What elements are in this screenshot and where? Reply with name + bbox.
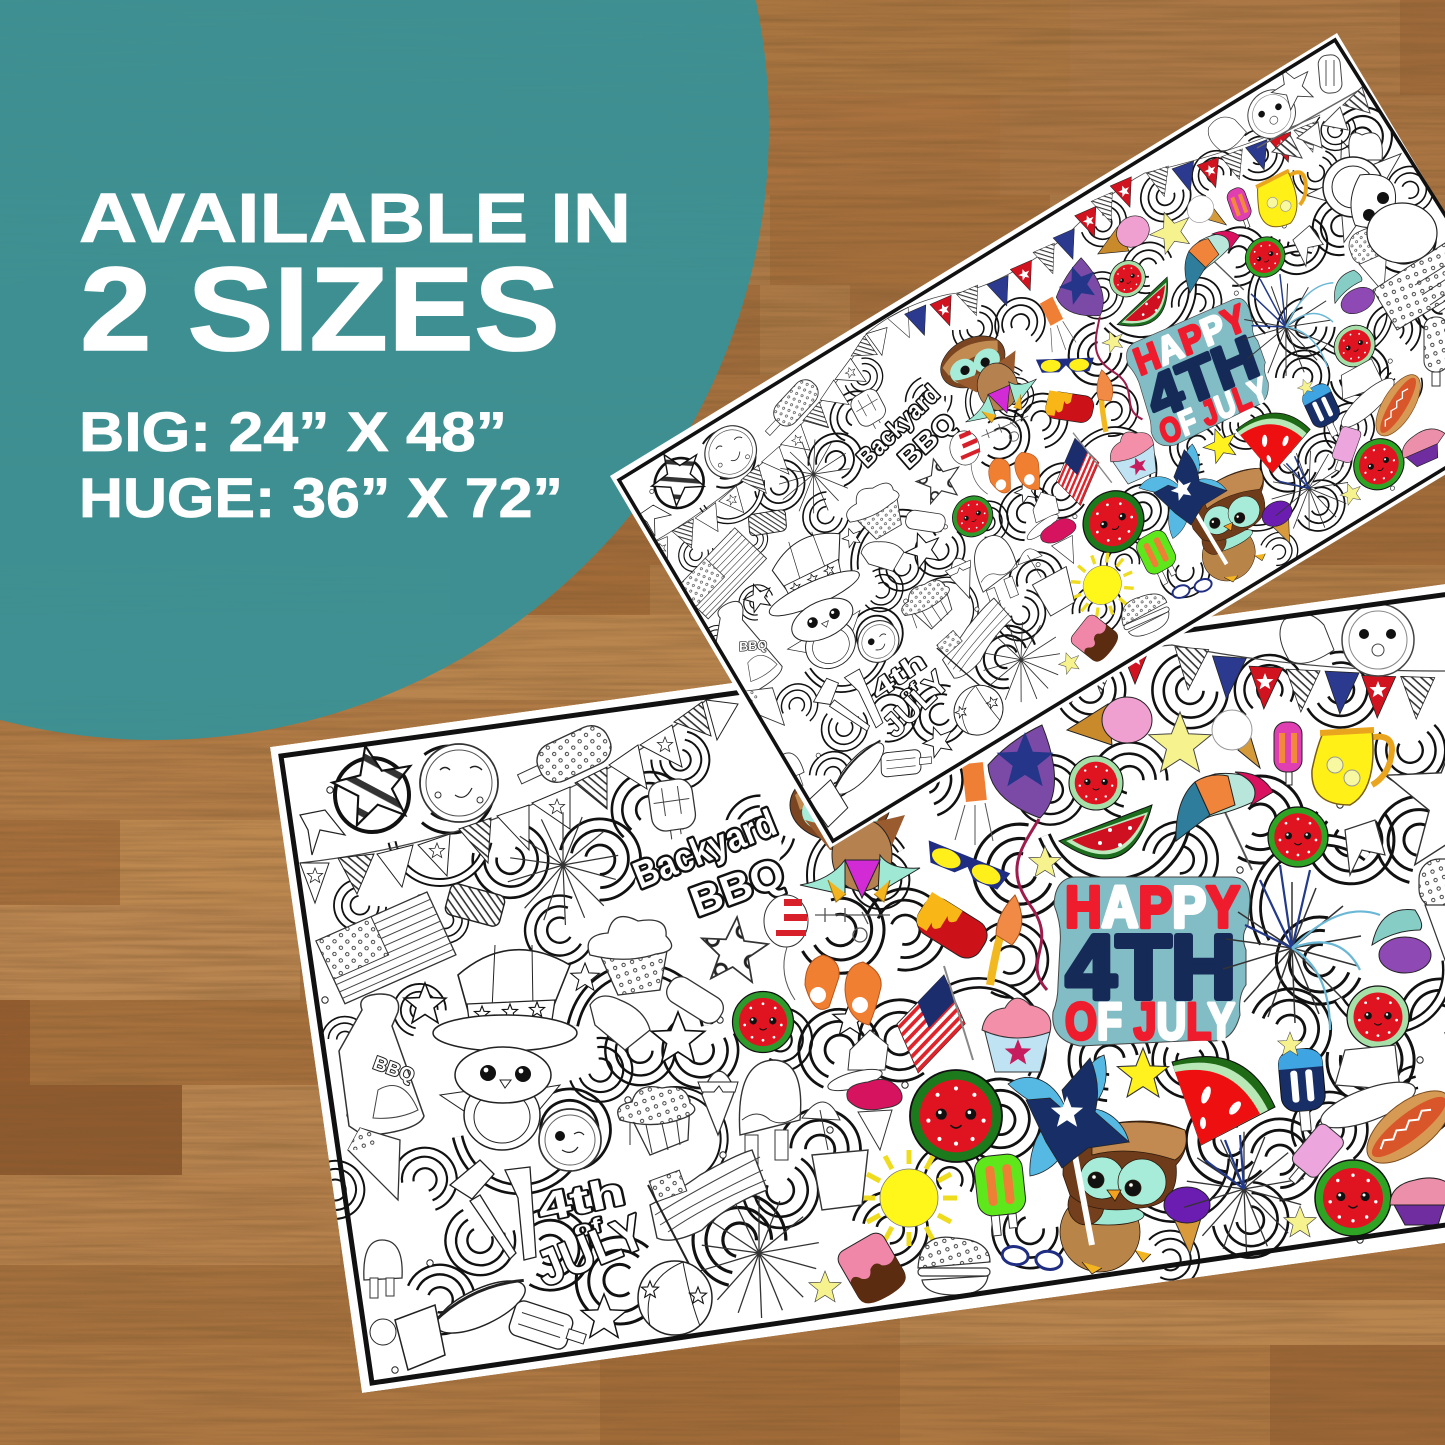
popsicle outline lower [507,1299,590,1356]
purple cupcake [1390,1178,1445,1225]
pale stars lower [809,1032,1316,1302]
popsicle and star top [1264,54,1343,114]
kawaii watermelon large [910,1070,1002,1162]
lower firework [1184,1132,1304,1254]
background swirls [310,642,1445,1373]
Backyard BBQ lettering: Backyard [628,802,782,897]
kawaii watermelon 1 [732,992,794,1052]
striped popsicle [444,882,506,928]
kawaii watermelon 5 [1315,1160,1391,1236]
ice cream with sunglasses [698,1071,738,1135]
4th of July outline lettering: 4th [534,1169,629,1231]
rocket orange [955,762,993,845]
beach ball [638,1261,712,1335]
pizza face [420,744,498,822]
happy 4th sign: HAPPY [1065,875,1240,940]
pennants top right [1257,87,1370,158]
hot dog colored [1355,1077,1445,1177]
4th of July outline lettering: of [571,1214,604,1242]
line popsicle [647,777,700,853]
Backyard BBQ lettering: BBQ [684,848,790,925]
dotted cone right [1419,859,1445,960]
pink cupcake [982,998,1051,1072]
pale star [1149,712,1211,772]
flag pole [944,966,973,1060]
lemonade pitcher [1312,730,1392,805]
purple balloon with star [988,725,1055,818]
dotted star [698,914,770,983]
4th of July outline lettering: JULY [528,1203,653,1297]
large poster border [281,587,1445,1383]
lemonade glass outline [370,1305,445,1370]
american flag outline [316,892,456,1004]
flag top right [1373,243,1445,330]
kawaii watermelon 3 [1268,807,1328,867]
white ice cream cone [1212,710,1260,768]
leaf pinwheel right [1345,820,1385,875]
owl with party belly [790,769,920,902]
sunglasses colored [921,840,1010,892]
small poster border [619,40,1445,841]
dotted popsicle right edge [1424,317,1445,386]
pale star small [1029,846,1061,877]
pinwheel outline [300,810,345,855]
BBQ apron: BBQ [370,1053,417,1087]
pink and chocolate popsicle [834,1229,911,1309]
heading: 2 sizes: 2 SIZES [80,243,560,376]
cupcake with stars outline [588,917,672,995]
waving flag outline [648,1150,767,1270]
small poster artwork [592,39,1445,858]
poster artwork [300,604,1445,1373]
dotted popsicle [511,720,617,797]
pink ice cream cone [1067,697,1152,745]
size line: huge: HUGE: 36” X 72” [79,466,563,529]
star yellow [1117,1048,1169,1097]
heart shape and stars [571,963,705,1063]
spatula and fork [450,1160,536,1260]
hot dog outline [428,1270,534,1344]
happy 4th sign: OF JULY [1065,993,1235,1051]
second pizza face [539,1109,601,1171]
purple ice cream cone [1164,1187,1210,1254]
ribbon [1017,819,1047,990]
heading: available in: AVAILABLE IN [79,179,631,257]
watermelon slice [1059,805,1152,859]
green popsicle [973,1153,1029,1237]
tall popsicle outline [739,1060,801,1165]
large poster [270,584,1445,1393]
pinwheel colored [1008,1055,1129,1176]
happy 4th sign [1053,875,1250,1051]
big star striped [326,738,420,832]
hat outline right [1316,1045,1420,1137]
size line: big: BIG: 24” X 48” [79,400,507,463]
star flag kite [348,1128,400,1200]
yellow and red popsicle [911,892,993,964]
firework outline lower [699,1196,819,1318]
star outline [404,983,446,1023]
popsicle top right outline [662,972,728,1028]
flag balloon [764,895,808,1000]
magenta popsicle [1274,722,1302,785]
outline sunglasses [1001,1245,1063,1271]
owl with pinwheel [1060,1113,1186,1274]
kawaii watermelon 2 [1069,756,1123,810]
pink ice cream with hat [826,1030,902,1150]
small umbrella [802,1102,840,1150]
teal circle panel [0,0,769,740]
uncle sam hat and owl [433,945,577,1150]
kawaii watermelon 4 [1347,986,1409,1048]
american flag colored [897,975,965,1073]
sun [861,1150,957,1246]
pink and purple hat ice cream [1372,909,1431,973]
paintbrush [990,895,1022,985]
small popsicle outline [364,1240,402,1298]
colored pennants right [817,647,1435,721]
pink popsicle [1280,1121,1346,1192]
pennant bunting left [300,642,1445,903]
navy popsicle [1277,1047,1328,1133]
jewelry skewer outline [815,908,890,942]
orange flip flops [805,955,881,1025]
burger outline [918,1237,990,1295]
pizza and bun top right [1280,604,1414,676]
happy 4th sign: 4TH [1066,918,1236,1018]
small poster [592,33,1445,858]
muffin outline [618,1087,695,1155]
large watermelon wedge [1172,1057,1275,1145]
BBQ apron [339,994,424,1136]
outline stars [581,720,1445,1337]
Backyard BBQ lettering [620,800,796,936]
liberty owl top right [1310,107,1443,263]
beach umbrella [1176,772,1273,870]
firework colored [1223,865,1380,1030]
firework outline [508,812,618,925]
lemonade glass small [812,1150,868,1210]
